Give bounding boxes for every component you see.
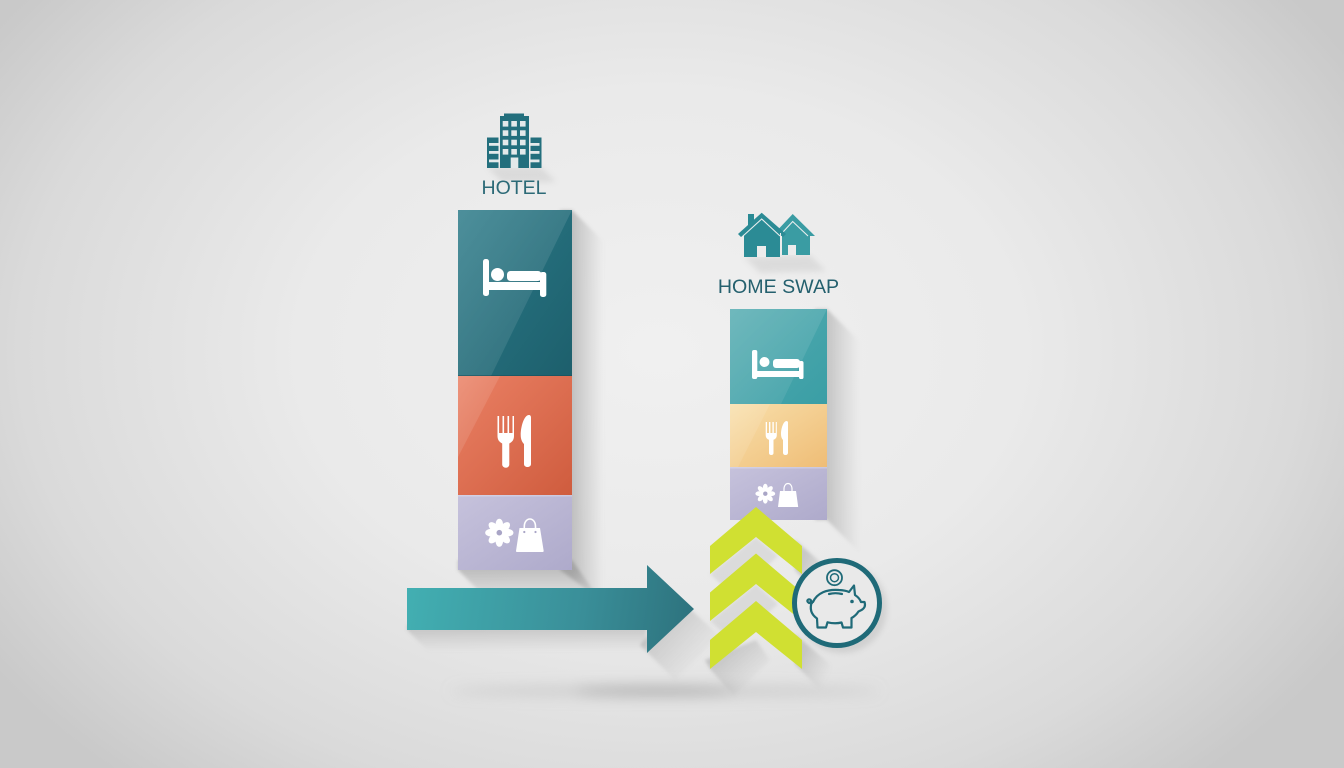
chevron: top [710,507,802,574]
icon: shopping bag [778,484,798,507]
segment: accommodation [730,309,827,404]
chevron: middle [710,554,802,621]
hotel icon and label [481,114,556,199]
chevron shadows [705,537,832,700]
arrow: hotel to home swap [407,565,694,653]
segment: food [458,376,572,495]
stacked bar: hotel [458,210,572,570]
long shadows: home swap bar [815,309,860,553]
icon: shopping bag [516,519,544,552]
segment: accommodation [458,210,572,376]
chevrons: savings increase [710,507,802,669]
segment: food [730,404,827,467]
ground shadow [450,686,880,696]
icon: fork and knife [497,415,531,468]
chevron: bottom [710,601,802,669]
icon: bed [483,259,546,297]
arrow shadow [407,600,720,680]
segment: shopping [730,467,827,520]
label: HOTEL: HOTEL [481,177,547,199]
icon: flower [755,484,775,504]
icon: fork and knife [766,421,788,455]
icon: bed [752,350,804,379]
stacked bar: home swap [730,309,827,520]
icon: two houses [738,213,826,273]
label: HOME SWAP: HOME SWAP [718,276,839,298]
long shadows: hotel bar [458,210,604,606]
home swap icon and label [718,213,839,298]
icon: piggy bank savings [794,560,887,653]
pig [807,586,865,628]
icon: flower [485,519,513,547]
icon: hotel building [487,114,556,182]
coin [827,570,842,585]
segment: shopping [458,495,572,570]
